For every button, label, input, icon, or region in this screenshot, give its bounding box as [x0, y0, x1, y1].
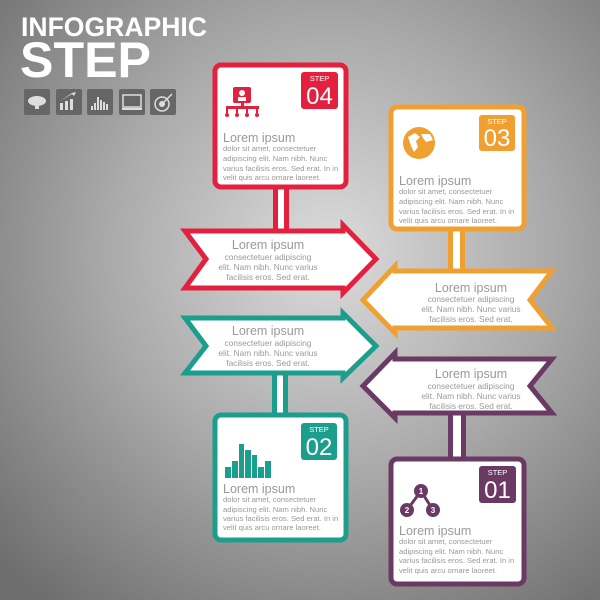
badge 04 [301, 72, 338, 110]
panel: step 02: dolor sit amet, consectetuer [223, 495, 317, 504]
panel: step 04 [215, 65, 346, 187]
arrow: teal [185, 313, 376, 378]
badge 02: STEP [309, 425, 329, 434]
arrow: orange: Lorem ipsum [435, 281, 507, 295]
arrow: teal: consectetuer adipiscing [225, 338, 312, 348]
arrow: orange: facilisis eros. Sed erat. [429, 314, 513, 324]
badge 03 [479, 115, 515, 152]
badge 03: STEP [487, 117, 507, 126]
panel: step 01: dolor sit amet, consectetuer [399, 537, 493, 546]
panel: step 02: adipiscing elit. Nam nibh. Nunc [223, 505, 327, 514]
panel: step 04: velit quis arcu ornare laoreet. [223, 173, 321, 182]
badge 01: 01 [484, 477, 511, 504]
panel: step 01: velit quis arcu ornare laoreet. [399, 566, 497, 575]
badge 01 [479, 466, 516, 504]
arrow: purple: Lorem ipsum [435, 367, 507, 381]
panel: step 01 [391, 459, 524, 584]
arrow: red: elit. Nam nibh. Nunc varius [218, 262, 318, 272]
arrow: orange: elit. Nam nibh. Nunc varius [421, 304, 521, 314]
panel: step 04: adipiscing elit. Nam nibh. Nunc [223, 154, 327, 163]
icon: 1-2-3 nodes: 1 [419, 487, 424, 496]
icon: 1-2-3 nodes [400, 484, 440, 517]
title: STEP [20, 32, 151, 88]
badge 01: STEP [488, 468, 507, 477]
icon: 1-2-3 nodes: 2 [405, 506, 410, 515]
arrow: purple [363, 353, 552, 418]
step 02 stem [272, 372, 288, 417]
title [20, 12, 207, 88]
icon: globe [403, 127, 435, 159]
badge 03: 03 [484, 125, 510, 152]
badge 02 [301, 423, 337, 461]
icon: bar chart [225, 444, 271, 478]
icon: 1-2-3 nodes: 3 [431, 506, 436, 515]
arrow: red: facilisis eros. Sed erat. [226, 272, 310, 282]
panel: step 01: varius facilisis eros. Sed erat. In in [399, 556, 514, 565]
arrow: teal: Lorem ipsum [232, 324, 304, 338]
icon: org chart [225, 87, 259, 117]
panel: step 01: adipiscing elit. Nam nibh. Nunc [399, 547, 503, 556]
panel: step 03: varius facilisis eros. Sed erat. In in [399, 207, 514, 216]
badge 02: 02 [306, 434, 332, 461]
arrow: purple: facilisis eros. Sed erat. [429, 401, 513, 411]
arrow: red: Lorem ipsum [232, 238, 304, 252]
panel: step 04: Lorem ipsum [223, 131, 295, 145]
panel: step 03: velit quis arcu ornare laoreet. [399, 216, 497, 225]
panel: step 03: dolor sit amet, consectetuer [399, 187, 493, 196]
panel: step 04: varius facilisis eros. Sed erat. In in [223, 164, 338, 173]
step 01 stem [448, 412, 466, 460]
arrow: red [185, 225, 376, 293]
icon row [24, 89, 176, 115]
arrow: red: consectetuer adipiscing [225, 252, 312, 262]
arrow: orange: consectetuer adipiscing [428, 294, 515, 304]
panel: step 03 [391, 107, 524, 229]
panel: step 02: Lorem ipsum [223, 482, 295, 496]
step 03 stem [448, 226, 465, 273]
arrow: teal: elit. Nam nibh. Nunc varius [218, 348, 318, 358]
title: INFOGRAPHIC [21, 12, 207, 42]
panel: step 02: varius facilisis eros. Sed erat. In in [223, 514, 338, 523]
arrow: purple: elit. Nam nibh. Nunc varius [421, 391, 521, 401]
panel: step 01: Lorem ipsum [399, 524, 471, 538]
panel: step 02 [215, 415, 346, 540]
panel: step 04: dolor sit amet, consectetuer [223, 144, 317, 153]
arrow: purple: consectetuer adipiscing [428, 381, 515, 391]
arrow: teal: facilisis eros. Sed erat. [226, 358, 310, 368]
panel: step 03: adipiscing elit. Nam nibh. Nunc [399, 197, 503, 206]
badge 04: 04 [306, 83, 333, 110]
panel: step 03: Lorem ipsum [399, 174, 471, 188]
panel: step 02: velit quis arcu ornare laoreet. [223, 523, 321, 532]
step 04 stem [273, 185, 289, 233]
badge 04: STEP [310, 74, 329, 83]
arrow: orange [363, 266, 552, 333]
